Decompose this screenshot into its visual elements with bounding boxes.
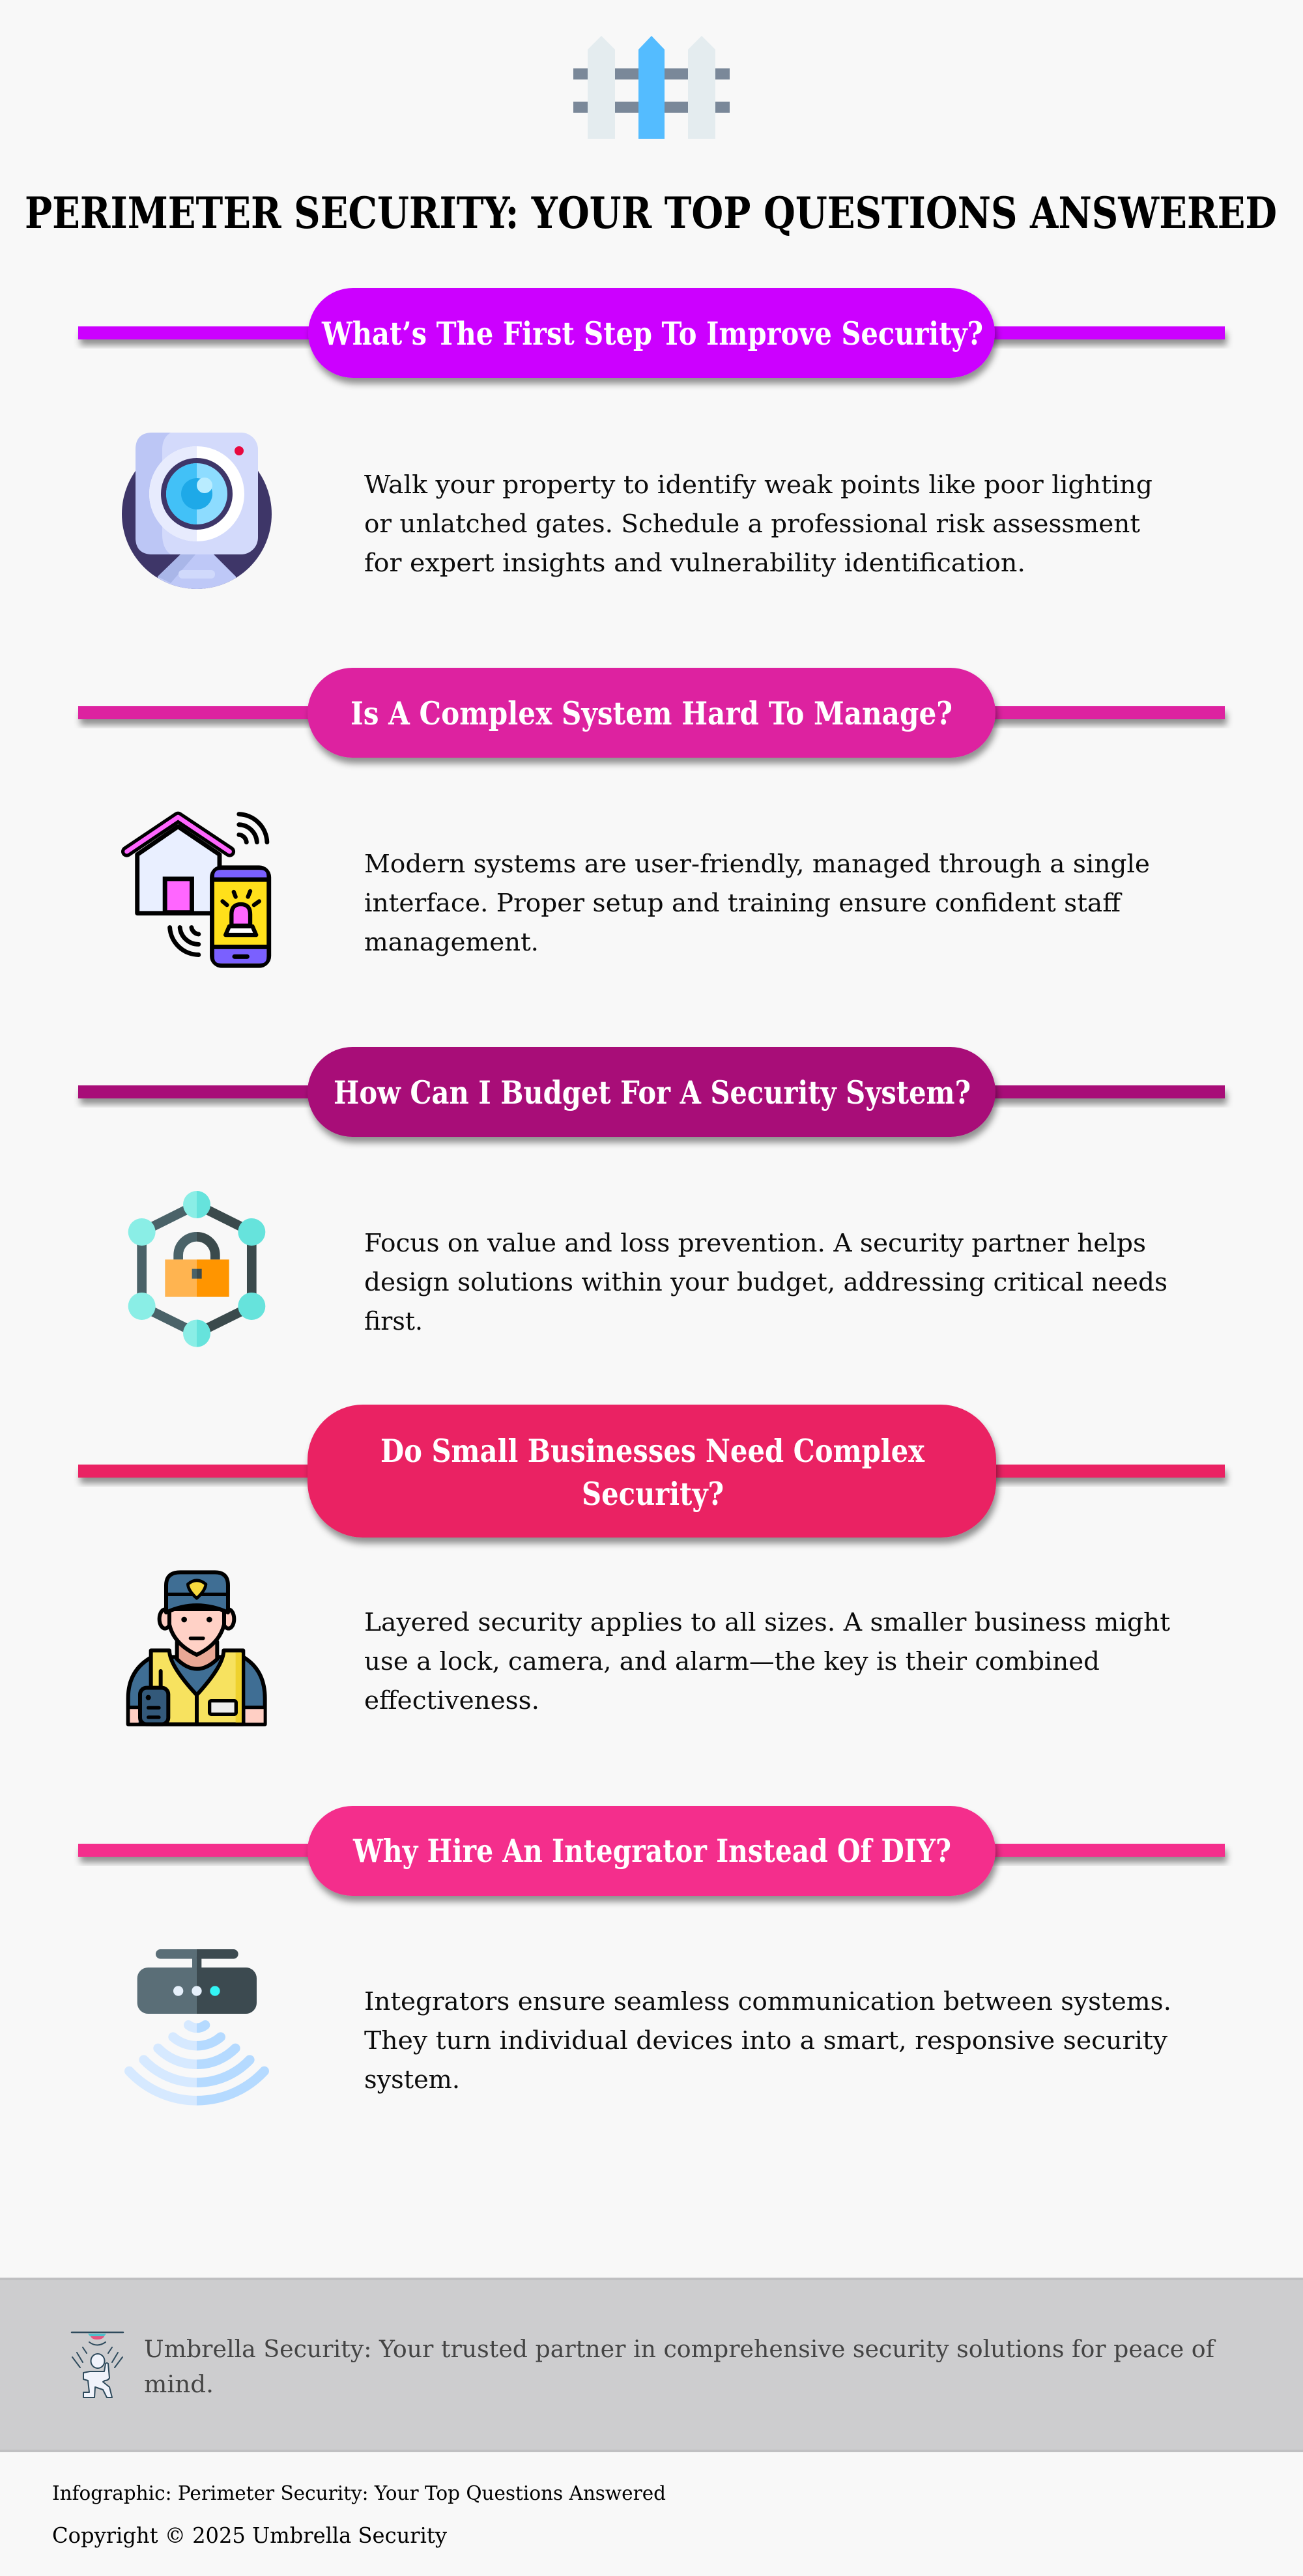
text: answer 1: for expert insights and vulnerability identification. [364, 549, 1025, 577]
panel: question 1 [78, 288, 1225, 593]
heading: question 5: Why Hire An Integrator Instead Of DIY? [352, 1832, 951, 1870]
heading: question 4 [78, 1405, 1225, 1538]
text: answer 5: system. [364, 2065, 460, 2094]
text: answer 2: interface. Proper setup and training ensure confident staff [364, 889, 1123, 917]
text: answer 1: or unlatched gates. Schedule a professional risk assessment [364, 509, 1140, 538]
text: answer 2: Modern systems are user-friendly, managed through a single [364, 850, 1150, 878]
text: answer 4: effectiveness. [364, 1686, 539, 1715]
heading: question 2: Is A Complex System Hard To Manage? [351, 694, 952, 732]
text: answer 4: use a lock, camera, and alarm—the key is their combined [364, 1647, 1100, 1676]
heading: question 2 [78, 668, 1225, 758]
heading: question 4: Security? [582, 1475, 724, 1513]
text: answer 3 [364, 1229, 1167, 1336]
footer text: Infographic: Perimeter Security: Your Top Questions Answered [52, 2482, 666, 2505]
text: answer 5: Integrators ensure seamless communication between systems. [364, 1987, 1171, 2016]
text: answer 3: first. [364, 1307, 423, 1336]
text: tagline [144, 2336, 1216, 2398]
text: answer 5 [364, 1987, 1171, 2094]
panel: question 4 [78, 1405, 1225, 1724]
text: answer 2: management. [364, 928, 539, 956]
icon: network padlock [128, 1191, 265, 1347]
panel: company tagline band [0, 2278, 1303, 2452]
icon: motion sensor person [72, 2332, 123, 2397]
text: answer 4 [364, 1608, 1170, 1715]
text: tagline: Umbrella Security: Your trusted partner in comprehensive security solutions for peace of [144, 2336, 1216, 2363]
panel: question 3 [78, 1047, 1225, 1347]
text: answer 1 [364, 470, 1153, 577]
heading: question 3 [78, 1047, 1225, 1137]
footer text [52, 2482, 666, 2548]
text: tagline: mind. [144, 2371, 214, 2398]
text: answer 1: Walk your property to identify weak points like poor lighting [364, 470, 1153, 499]
text: answer 3: design solutions within your budget, addressing critical needs [364, 1268, 1167, 1296]
icon: wireless router [129, 1949, 265, 2100]
footer text: Copyright © 2025 Umbrella Security [52, 2523, 447, 2548]
text: answer 5: They turn individual devices into a smart, responsive security [364, 2026, 1168, 2055]
icon: security guard [128, 1572, 265, 1724]
icon: picket fence [573, 36, 730, 139]
heading: question 1: What’s The First Step To Improve Security? [321, 315, 983, 352]
heading: question 4: Do Small Businesses Need Complex [380, 1432, 925, 1470]
text: answer 2 [364, 850, 1150, 956]
panel: question 5 [78, 1806, 1225, 2100]
heading: question 1 [78, 288, 1225, 378]
icon: security camera [122, 433, 272, 593]
heading: question 3: How Can I Budget For A Security System? [334, 1074, 971, 1111]
text: answer 3: Focus on value and loss prevention. A security partner helps [364, 1229, 1146, 1257]
panel: question 2 [78, 668, 1225, 966]
icon: smart home alarm [127, 814, 269, 966]
heading: question 5 [78, 1806, 1225, 1896]
text: answer 4: Layered security applies to all sizes. A smaller business might [364, 1608, 1170, 1637]
